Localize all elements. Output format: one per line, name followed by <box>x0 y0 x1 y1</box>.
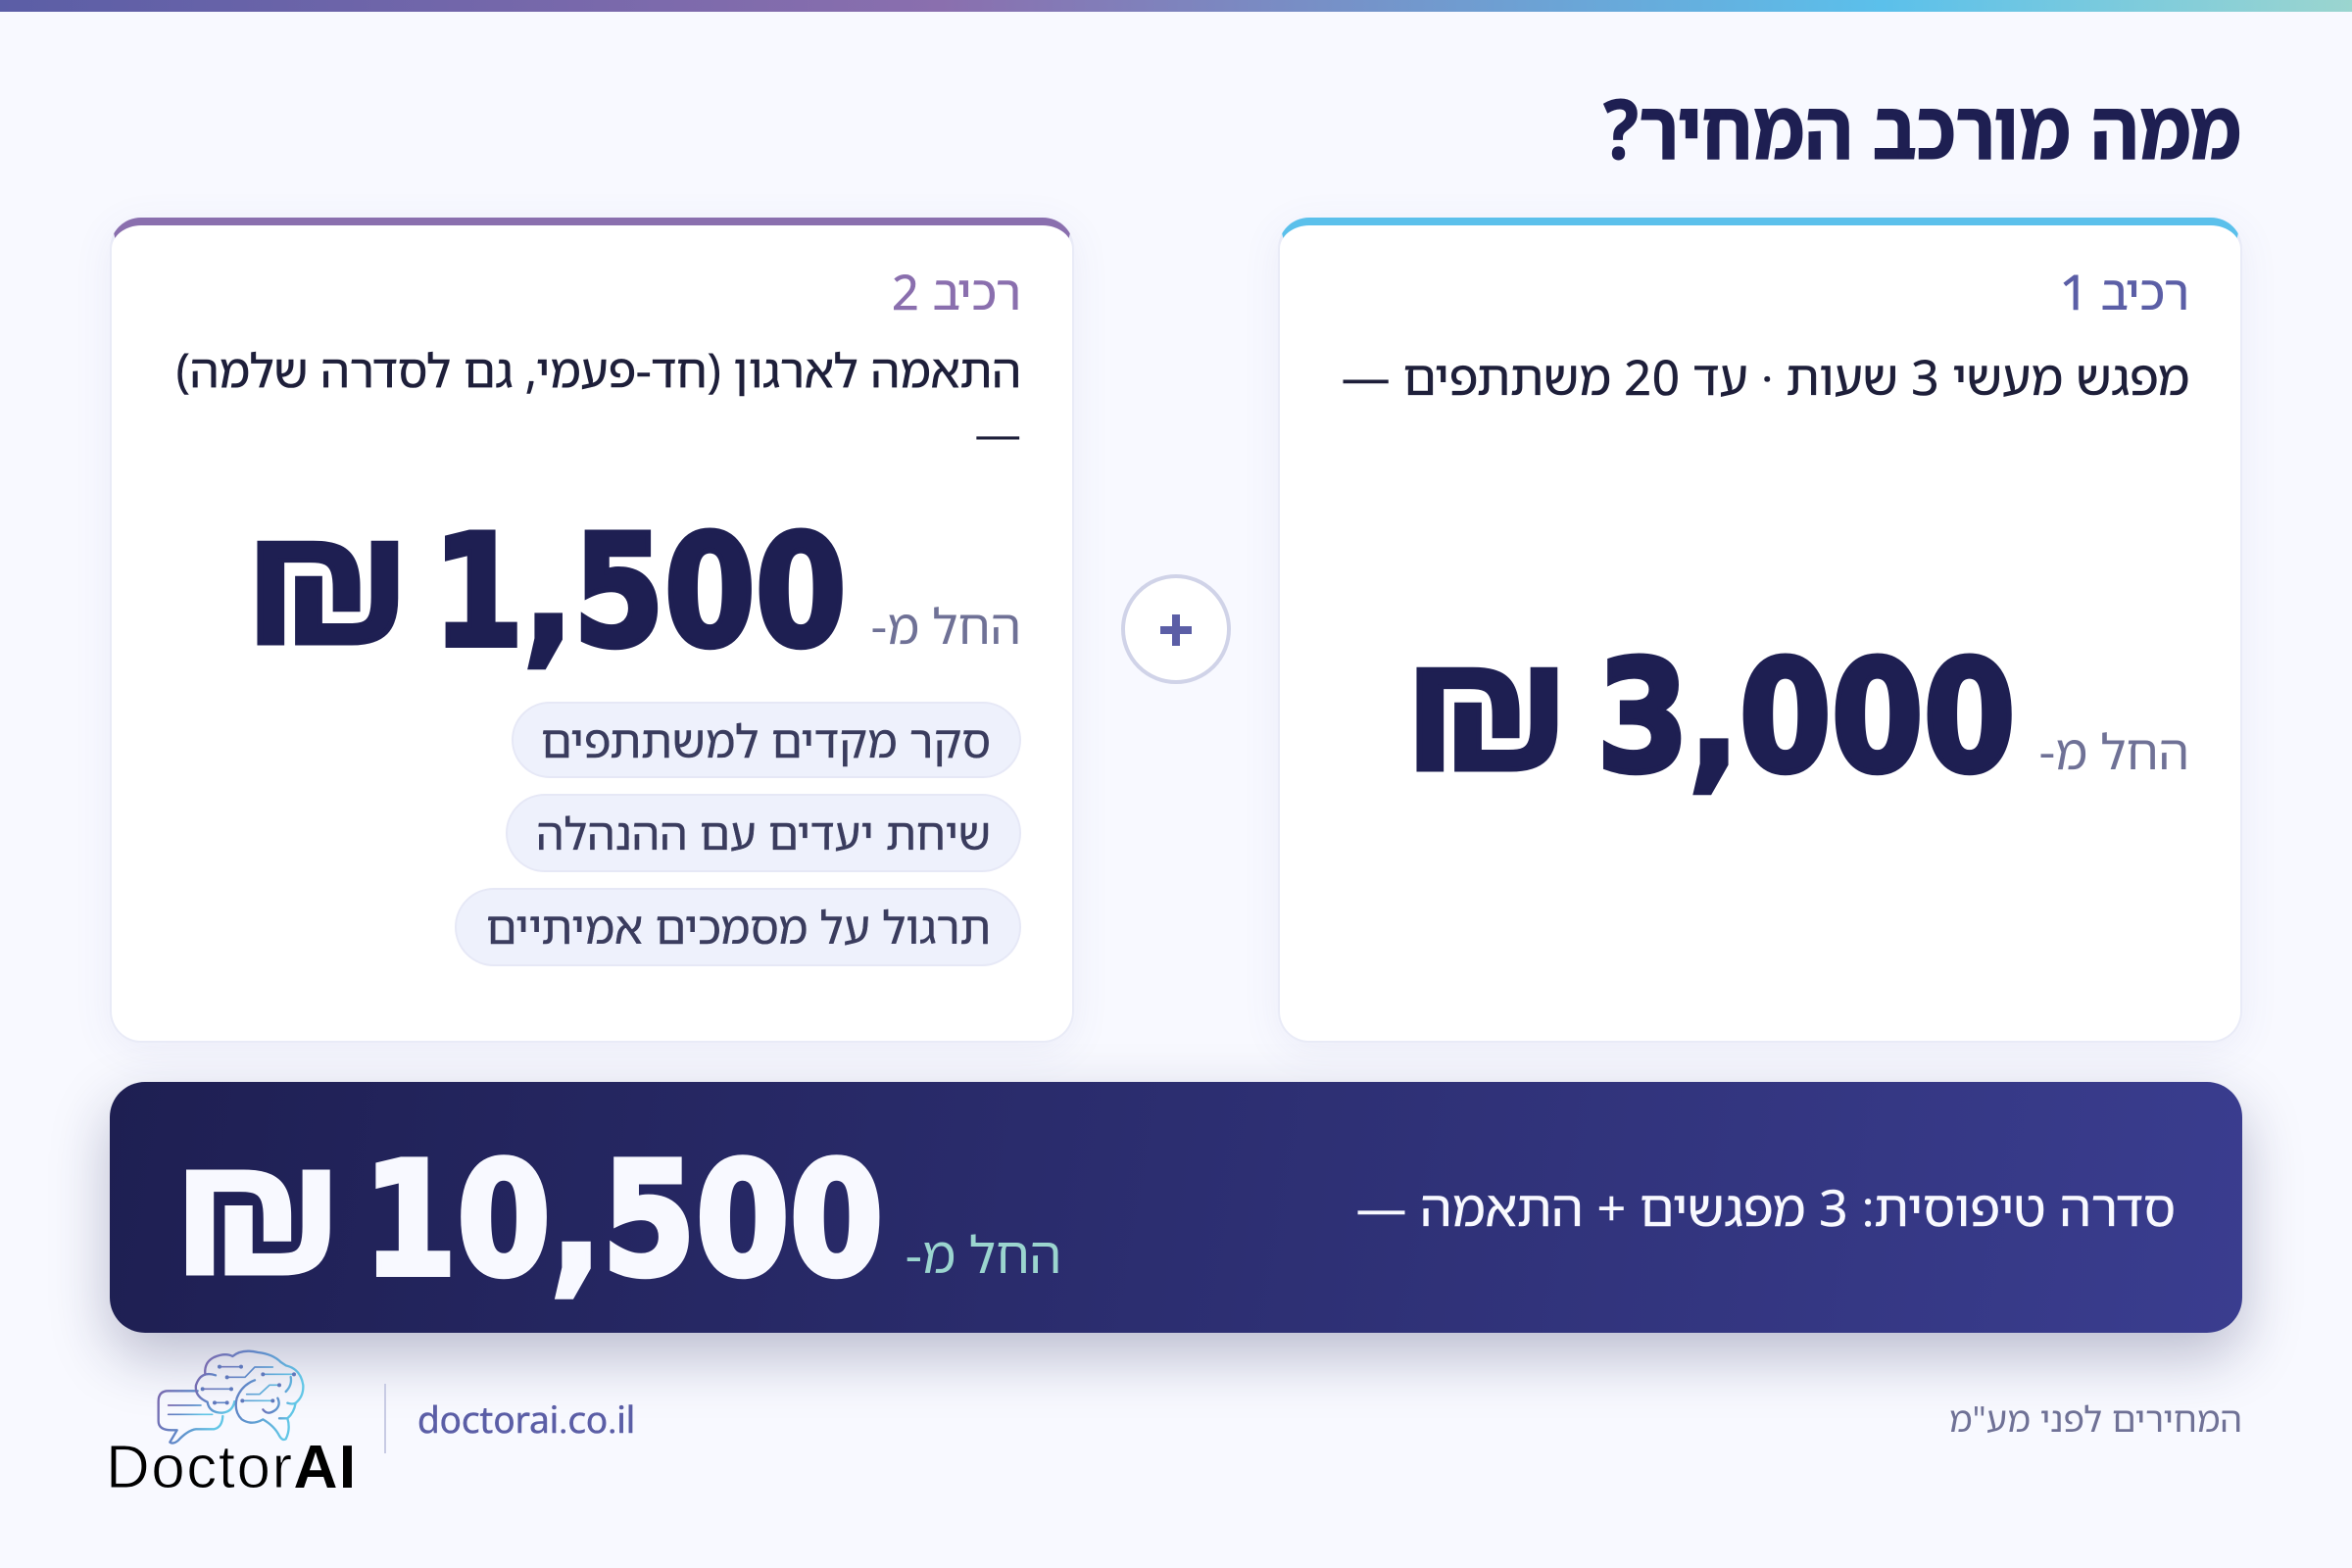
pill: real documents practice <box>455 888 1021 966</box>
component 2 price: ₪ <box>243 494 412 678</box>
total description: סדרה טיפוסית: 3 מפגשים + התאמה — <box>1356 1173 2176 1242</box>
component 2 description: התאמה לארגון (חד-פעמי, גם לסדרה שלמה) <box>176 337 1021 401</box>
component 1 from label: החל מ- <box>2039 717 2189 784</box>
total from label: החל מ- <box>906 1219 1061 1289</box>
component 1 price: 3,000 <box>1597 628 2016 808</box>
panel: component 1 <box>1278 218 2242 1043</box>
icon: brain and speech bubble <box>157 1350 304 1445</box>
top gradient bar <box>0 0 2352 12</box>
title: ממה מורכב המחיר? <box>1603 71 2241 183</box>
plus sign <box>1160 614 1192 646</box>
logo wordmark: DoctorAI <box>106 1434 358 1501</box>
pill: real documents practice: תרגול על מסמכים אמיתיים <box>486 897 991 957</box>
footer website: doctorai.co.il <box>417 1394 635 1444</box>
component 1 description: מפגש מעשי 3 שעות · עד 20 משתתפים — <box>1342 344 2189 410</box>
footer note: המחירים לפני מע"מ <box>1949 1395 2242 1443</box>
plus connector icon <box>1121 574 1231 684</box>
pill: goals conversation <box>506 794 1021 872</box>
component 2 price: 1,500 <box>433 503 847 682</box>
panel: component 2 <box>110 218 1074 1043</box>
total price: 10,500 <box>363 1128 883 1311</box>
component 2 label: רכיב 2 <box>892 259 1021 324</box>
component 1 label: רכיב 1 <box>2060 259 2189 324</box>
panel: total price bar <box>110 1082 2242 1333</box>
component 2 price <box>243 494 847 682</box>
pill: pre-survey: סקר מקדים למשתתפים <box>541 710 991 771</box>
footer divider <box>384 1384 386 1453</box>
pill: goals conversation: שיחת יעדים עם ההנהלה <box>536 804 991 863</box>
component 1 price <box>1402 620 2016 808</box>
component 2 description dash: — <box>974 401 1021 465</box>
total price: ₪ <box>172 1123 344 1309</box>
component 2 from label: החל מ- <box>871 592 1021 659</box>
footer logo <box>106 1350 358 1501</box>
component 1 price: ₪ <box>1402 620 1571 805</box>
